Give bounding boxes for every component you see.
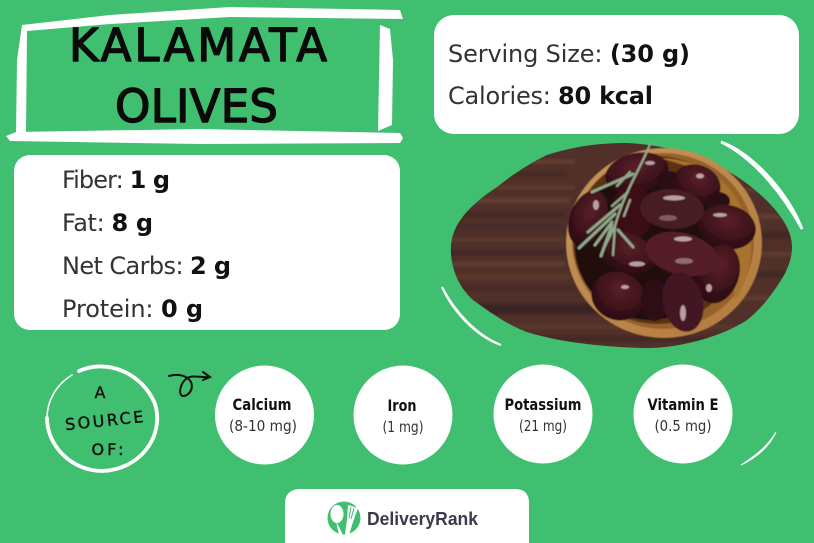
panel: macronutrients: Fiber: 1 g bbox=[62, 166, 170, 194]
badge text: SOURCE bbox=[64, 407, 147, 434]
panel: serving size and calories: Serving Size: (30 g) bbox=[448, 40, 690, 68]
panel: serving size and calories bbox=[434, 15, 799, 134]
nutrient circle: potassium: (21 mg) bbox=[519, 417, 567, 435]
heading: Kalamata Olives: KALAMATA bbox=[69, 19, 327, 72]
panel: macronutrients bbox=[14, 155, 400, 330]
rosemary sprig bbox=[579, 144, 650, 256]
panel: macronutrients: Fat: 8 g bbox=[62, 209, 153, 237]
wooden bowl bbox=[566, 148, 762, 338]
badge text: OF: bbox=[92, 440, 126, 459]
logo panel: DeliveryRank bbox=[285, 489, 529, 543]
title panel: brush frame and heading bbox=[6, 7, 403, 144]
ring bbox=[47, 366, 157, 471]
nutrient circle: vitamin e bbox=[634, 364, 732, 464]
badge: a source of bbox=[47, 366, 157, 471]
panel: serving size and calories: Calories: 80 kcal bbox=[448, 82, 653, 110]
nutrient circle: calcium: Calcium bbox=[232, 395, 292, 414]
photo: bowl of olives on wood bbox=[442, 140, 802, 352]
badge text bbox=[64, 383, 147, 459]
panel: macronutrients: Net Carbs: 2 g bbox=[62, 252, 231, 280]
heading: Kalamata Olives: OLIVES bbox=[115, 80, 278, 133]
brush arc near vitamin e bbox=[741, 432, 776, 465]
nutrient circle: calcium: (8-10 mg) bbox=[229, 417, 297, 435]
brush arcs around photo bbox=[721, 142, 802, 229]
icon: loop arrow bbox=[169, 372, 210, 396]
wordmark: DeliveryRank bbox=[367, 508, 479, 529]
icon: spoon and fork logo bbox=[328, 502, 360, 535]
olive highlights bbox=[593, 161, 727, 321]
nutrient circle: iron: Iron bbox=[388, 396, 416, 415]
badge text: A bbox=[95, 383, 106, 402]
brush frame bbox=[6, 7, 403, 144]
nutrient circle: vitamin e: Vitamin E bbox=[648, 395, 718, 414]
nutrient circle: calcium bbox=[215, 366, 314, 464]
panel: macronutrients: Protein: 0 g bbox=[62, 295, 203, 323]
olives bbox=[602, 147, 672, 199]
nutrient circle: iron: (1 mg) bbox=[382, 418, 424, 436]
nutrient circle: iron bbox=[354, 366, 452, 464]
heading: Kalamata Olives bbox=[69, 19, 327, 133]
nutrient circle: vitamin e: (0.5 mg) bbox=[654, 417, 712, 435]
nutrient circle: potassium bbox=[494, 364, 592, 464]
nutrient circle: potassium: Potassium bbox=[504, 395, 582, 414]
